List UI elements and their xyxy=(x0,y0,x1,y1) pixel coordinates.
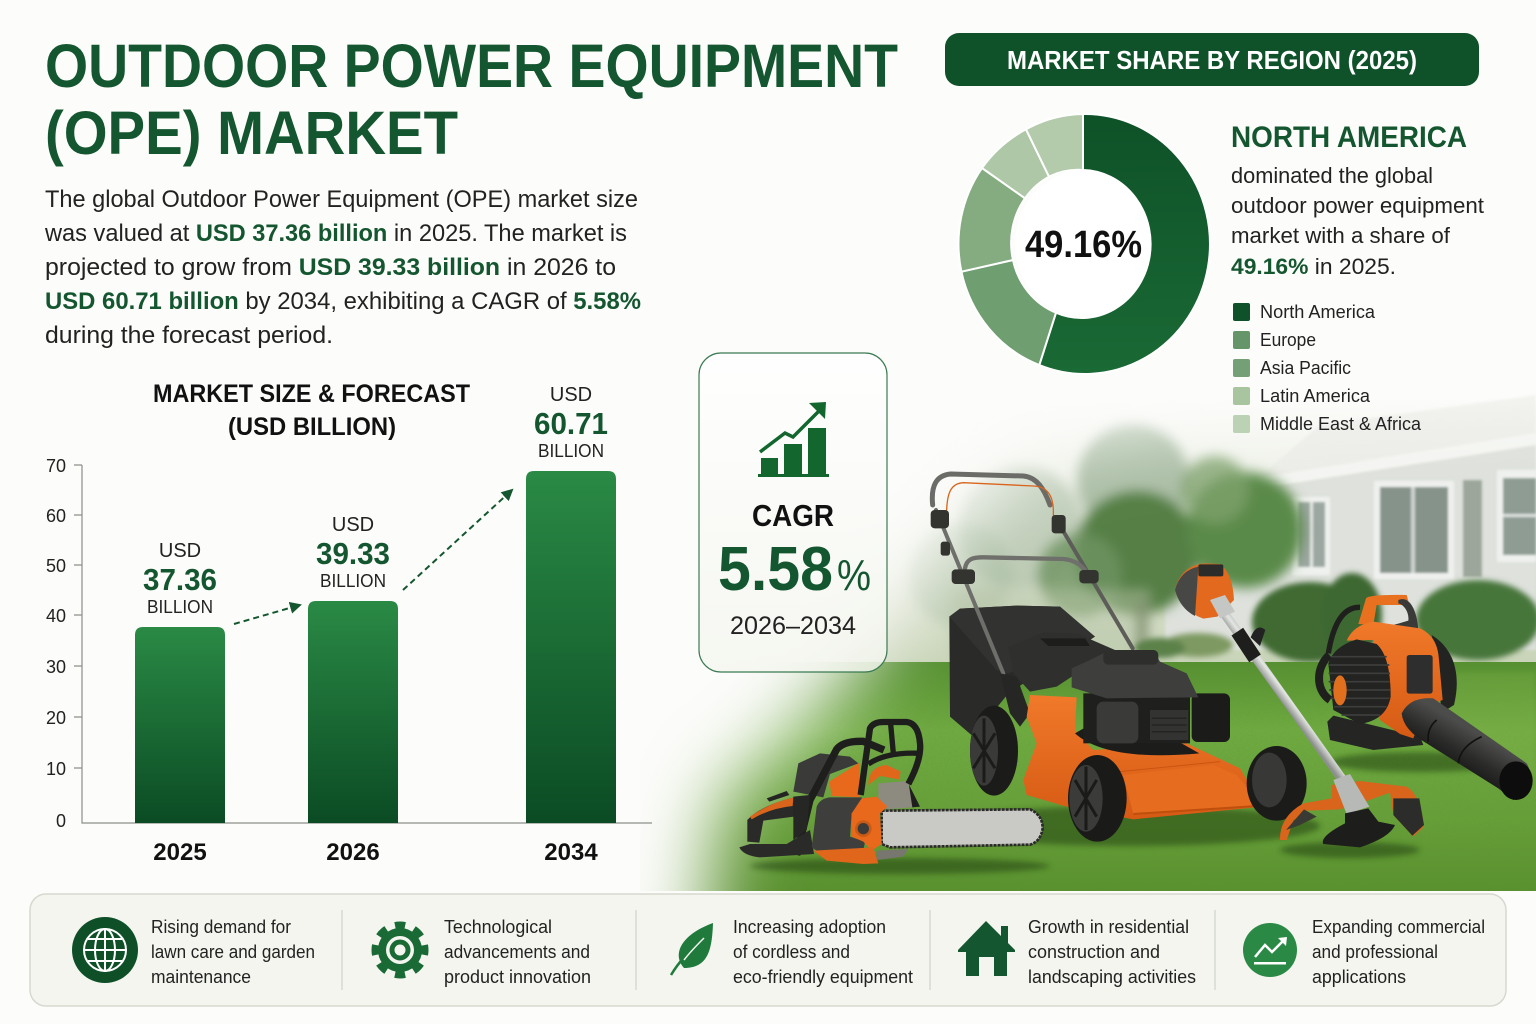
bar 2034 xyxy=(526,471,616,823)
axis labels xyxy=(46,456,66,831)
year labels: 2026 xyxy=(326,839,380,866)
segment: Asia Pacific xyxy=(959,168,1025,272)
chainsaw grey tank xyxy=(878,781,912,809)
label 2034 value xyxy=(534,384,608,461)
fog fading scene into page xyxy=(480,300,1536,1000)
year labels: 2034 xyxy=(544,839,598,866)
text: eco-friendly: of cordless and xyxy=(733,942,850,962)
text: eco-friendly: Increasing adoption xyxy=(733,917,886,937)
CAGR label: CAGR xyxy=(752,498,834,533)
mowing stripe xyxy=(1320,672,1536,780)
icon: chainsaw xyxy=(739,722,1043,864)
heading: market share by region xyxy=(945,33,1479,86)
arrow 2026 to 2034 xyxy=(403,490,512,590)
arrow 2025 to 2026 xyxy=(234,605,300,624)
chart heading: MARKET SIZE & FORECAST xyxy=(153,380,470,408)
intro paragraph xyxy=(44,186,641,349)
intro paragraph: projected to grow from USD 39.33 billion in 2026 to xyxy=(45,254,616,281)
region callout text: market with a share of xyxy=(1231,223,1451,248)
mower rear wheel xyxy=(970,706,1018,796)
label 2026 value: USD xyxy=(332,514,374,536)
label 2025 value: USD xyxy=(159,540,201,562)
text: lawn care: maintenance xyxy=(151,967,251,987)
bar 2026 xyxy=(308,601,398,823)
chainsaw orange centre xyxy=(829,763,859,797)
chart heading: (USD BILLION) xyxy=(228,413,396,441)
heading: market share by region: MARKET SHARE BY REGION (2025) xyxy=(1007,45,1417,75)
driver: lawn care xyxy=(72,917,315,987)
chainsaw orange front xyxy=(852,797,887,851)
label 2034 value: 60.71 xyxy=(534,406,608,441)
intro paragraph: The global Outdoor Power Equipment (OPE) market size xyxy=(45,186,638,213)
segment: Middle East and Africa xyxy=(1026,114,1083,177)
mower orange deck xyxy=(1023,695,1263,819)
segment: Europe xyxy=(961,260,1056,365)
icon: string trimmer xyxy=(1175,563,1424,847)
driver: residential xyxy=(958,917,1196,987)
text: commercial: and professional xyxy=(1312,942,1438,962)
title: (OPE) MARKET xyxy=(45,99,458,167)
chainsaw back leg xyxy=(907,780,920,807)
panel: growth drivers xyxy=(30,894,1506,1006)
icon: house xyxy=(958,921,1015,976)
chart heading xyxy=(153,380,470,441)
blower orange body xyxy=(1347,622,1443,738)
chainsaw dark body panel xyxy=(812,797,865,851)
CAGR value: 5.58 xyxy=(718,535,833,604)
chainsaw bar xyxy=(882,809,1043,847)
mower grass bag xyxy=(949,606,1095,737)
region callout text: dominated the global xyxy=(1231,163,1433,188)
icon: globe xyxy=(72,917,138,983)
chainsaw front guard loop xyxy=(868,765,901,785)
trimmer orange guard xyxy=(1280,781,1424,840)
shrubs xyxy=(1135,573,1536,662)
year labels xyxy=(153,839,598,866)
label 2025 value: BILLION xyxy=(147,597,213,617)
icon: growth chart xyxy=(758,402,829,477)
donut value: 49.16% xyxy=(1025,224,1142,266)
text: residential: landscaping activities xyxy=(1028,967,1196,987)
trimmer shaft xyxy=(1218,605,1345,783)
axis labels: 60 xyxy=(46,506,66,526)
label 2025 value xyxy=(143,540,217,617)
trimmer spool xyxy=(1323,808,1395,847)
label 2026 value: 39.33 xyxy=(316,536,390,571)
shadows on grass xyxy=(750,752,1510,874)
text: lawn care xyxy=(151,917,315,987)
hazy garden backdrop xyxy=(640,400,1536,670)
axis labels: 40 xyxy=(46,606,66,626)
chainsaw handles xyxy=(797,722,920,855)
blower strap xyxy=(1328,607,1360,653)
legend: Middle East & Africa xyxy=(1260,414,1422,434)
text: residential xyxy=(1028,917,1196,987)
donut centre xyxy=(1015,170,1151,316)
text: commercial xyxy=(1312,917,1485,987)
intro paragraph: USD 60.71 billion by 2034, exhibiting a CAGR of 5.58% xyxy=(45,288,641,315)
text: residential: Growth in residential xyxy=(1028,917,1189,937)
label 2034 value: USD xyxy=(550,384,592,406)
chainsaw rear handle xyxy=(739,830,814,857)
panel: CAGR xyxy=(699,353,887,672)
axis labels: 50 xyxy=(46,556,66,576)
intro paragraph: was valued at USD 37.36 billion in 2025. The market is xyxy=(44,220,627,247)
text: commercial: applications xyxy=(1312,967,1406,987)
CAGR value: % xyxy=(837,551,871,600)
legend: Europe xyxy=(1260,330,1316,350)
year labels: 2025 xyxy=(153,839,207,866)
blower engine xyxy=(1328,639,1391,724)
segment: Latin America xyxy=(982,129,1049,198)
mower engine xyxy=(1075,727,1199,755)
grass texture xyxy=(640,662,1536,891)
lawn xyxy=(640,662,1536,891)
region callout text: 49.16% in 2025. xyxy=(1231,254,1396,279)
bar 2025 xyxy=(135,627,225,823)
icon: leaf blower xyxy=(1319,595,1533,800)
axis labels: 20 xyxy=(46,708,66,728)
trimmer collar xyxy=(1333,774,1369,814)
mower front wheels xyxy=(1247,746,1307,821)
icon: lawn mower xyxy=(931,474,1307,842)
intro paragraph: during the forecast period. xyxy=(45,322,333,349)
text: eco-friendly: eco-friendly equipment xyxy=(733,967,913,987)
driver: eco-friendly xyxy=(671,917,913,987)
bar chart xyxy=(46,384,652,866)
title xyxy=(45,32,898,167)
legend: Latin America xyxy=(1260,386,1371,406)
text: eco-friendly xyxy=(733,917,913,987)
driver: technology xyxy=(376,917,591,987)
text: commercial: Expanding commercial xyxy=(1312,917,1485,937)
icon: growth badge xyxy=(1243,923,1297,977)
trimmer head unit xyxy=(1175,563,1234,619)
text: technology: product innovation xyxy=(444,967,591,987)
blurred trees xyxy=(908,424,1303,660)
text: technology: Technological xyxy=(444,917,552,937)
legend: North America xyxy=(1260,302,1376,322)
axis labels: 10 xyxy=(46,759,66,779)
segment: North America xyxy=(1039,114,1210,374)
label 2025 value: 37.36 xyxy=(143,562,217,597)
icon: gear xyxy=(376,926,424,974)
text: lawn care: Rising demand for xyxy=(151,917,291,937)
mower black housing xyxy=(1008,633,1115,692)
icon: leaf xyxy=(671,923,713,975)
CAGR period: 2026–2034 xyxy=(730,612,856,640)
legend xyxy=(1233,302,1422,434)
text: residential: construction and xyxy=(1028,942,1160,962)
axis labels: 0 xyxy=(56,811,66,831)
donut chart xyxy=(959,114,1210,374)
axis labels: 30 xyxy=(46,657,66,677)
label 2026 value: BILLION xyxy=(320,571,386,591)
chainsaw bottom xyxy=(813,847,878,864)
label 2026 value xyxy=(316,514,390,591)
house xyxy=(1165,395,1536,650)
title: OUTDOOR POWER EQUIPMENT xyxy=(45,32,898,100)
text: lawn care: lawn care and garden xyxy=(151,942,315,962)
blower base xyxy=(1327,716,1423,750)
text: technology xyxy=(444,917,591,987)
region callout text: NORTH AMERICA xyxy=(1231,121,1467,154)
blower window xyxy=(1407,655,1433,694)
driver: commercial xyxy=(1243,917,1485,987)
legend: Asia Pacific xyxy=(1260,358,1351,378)
blower badge xyxy=(1333,675,1347,705)
blower tube xyxy=(1402,698,1530,800)
chainsaw top cover xyxy=(793,753,858,797)
label 2034 value: BILLION xyxy=(538,441,604,461)
axis labels: 70 xyxy=(46,456,66,476)
photo scene: garden with lawn and outdoor power equipment xyxy=(480,300,1536,1000)
mower handle xyxy=(932,474,1133,673)
text: technology: advancements and xyxy=(444,942,590,962)
region callout text xyxy=(1231,121,1484,279)
blower handle xyxy=(1358,595,1409,625)
region callout text: outdoor power equipment xyxy=(1231,193,1484,218)
